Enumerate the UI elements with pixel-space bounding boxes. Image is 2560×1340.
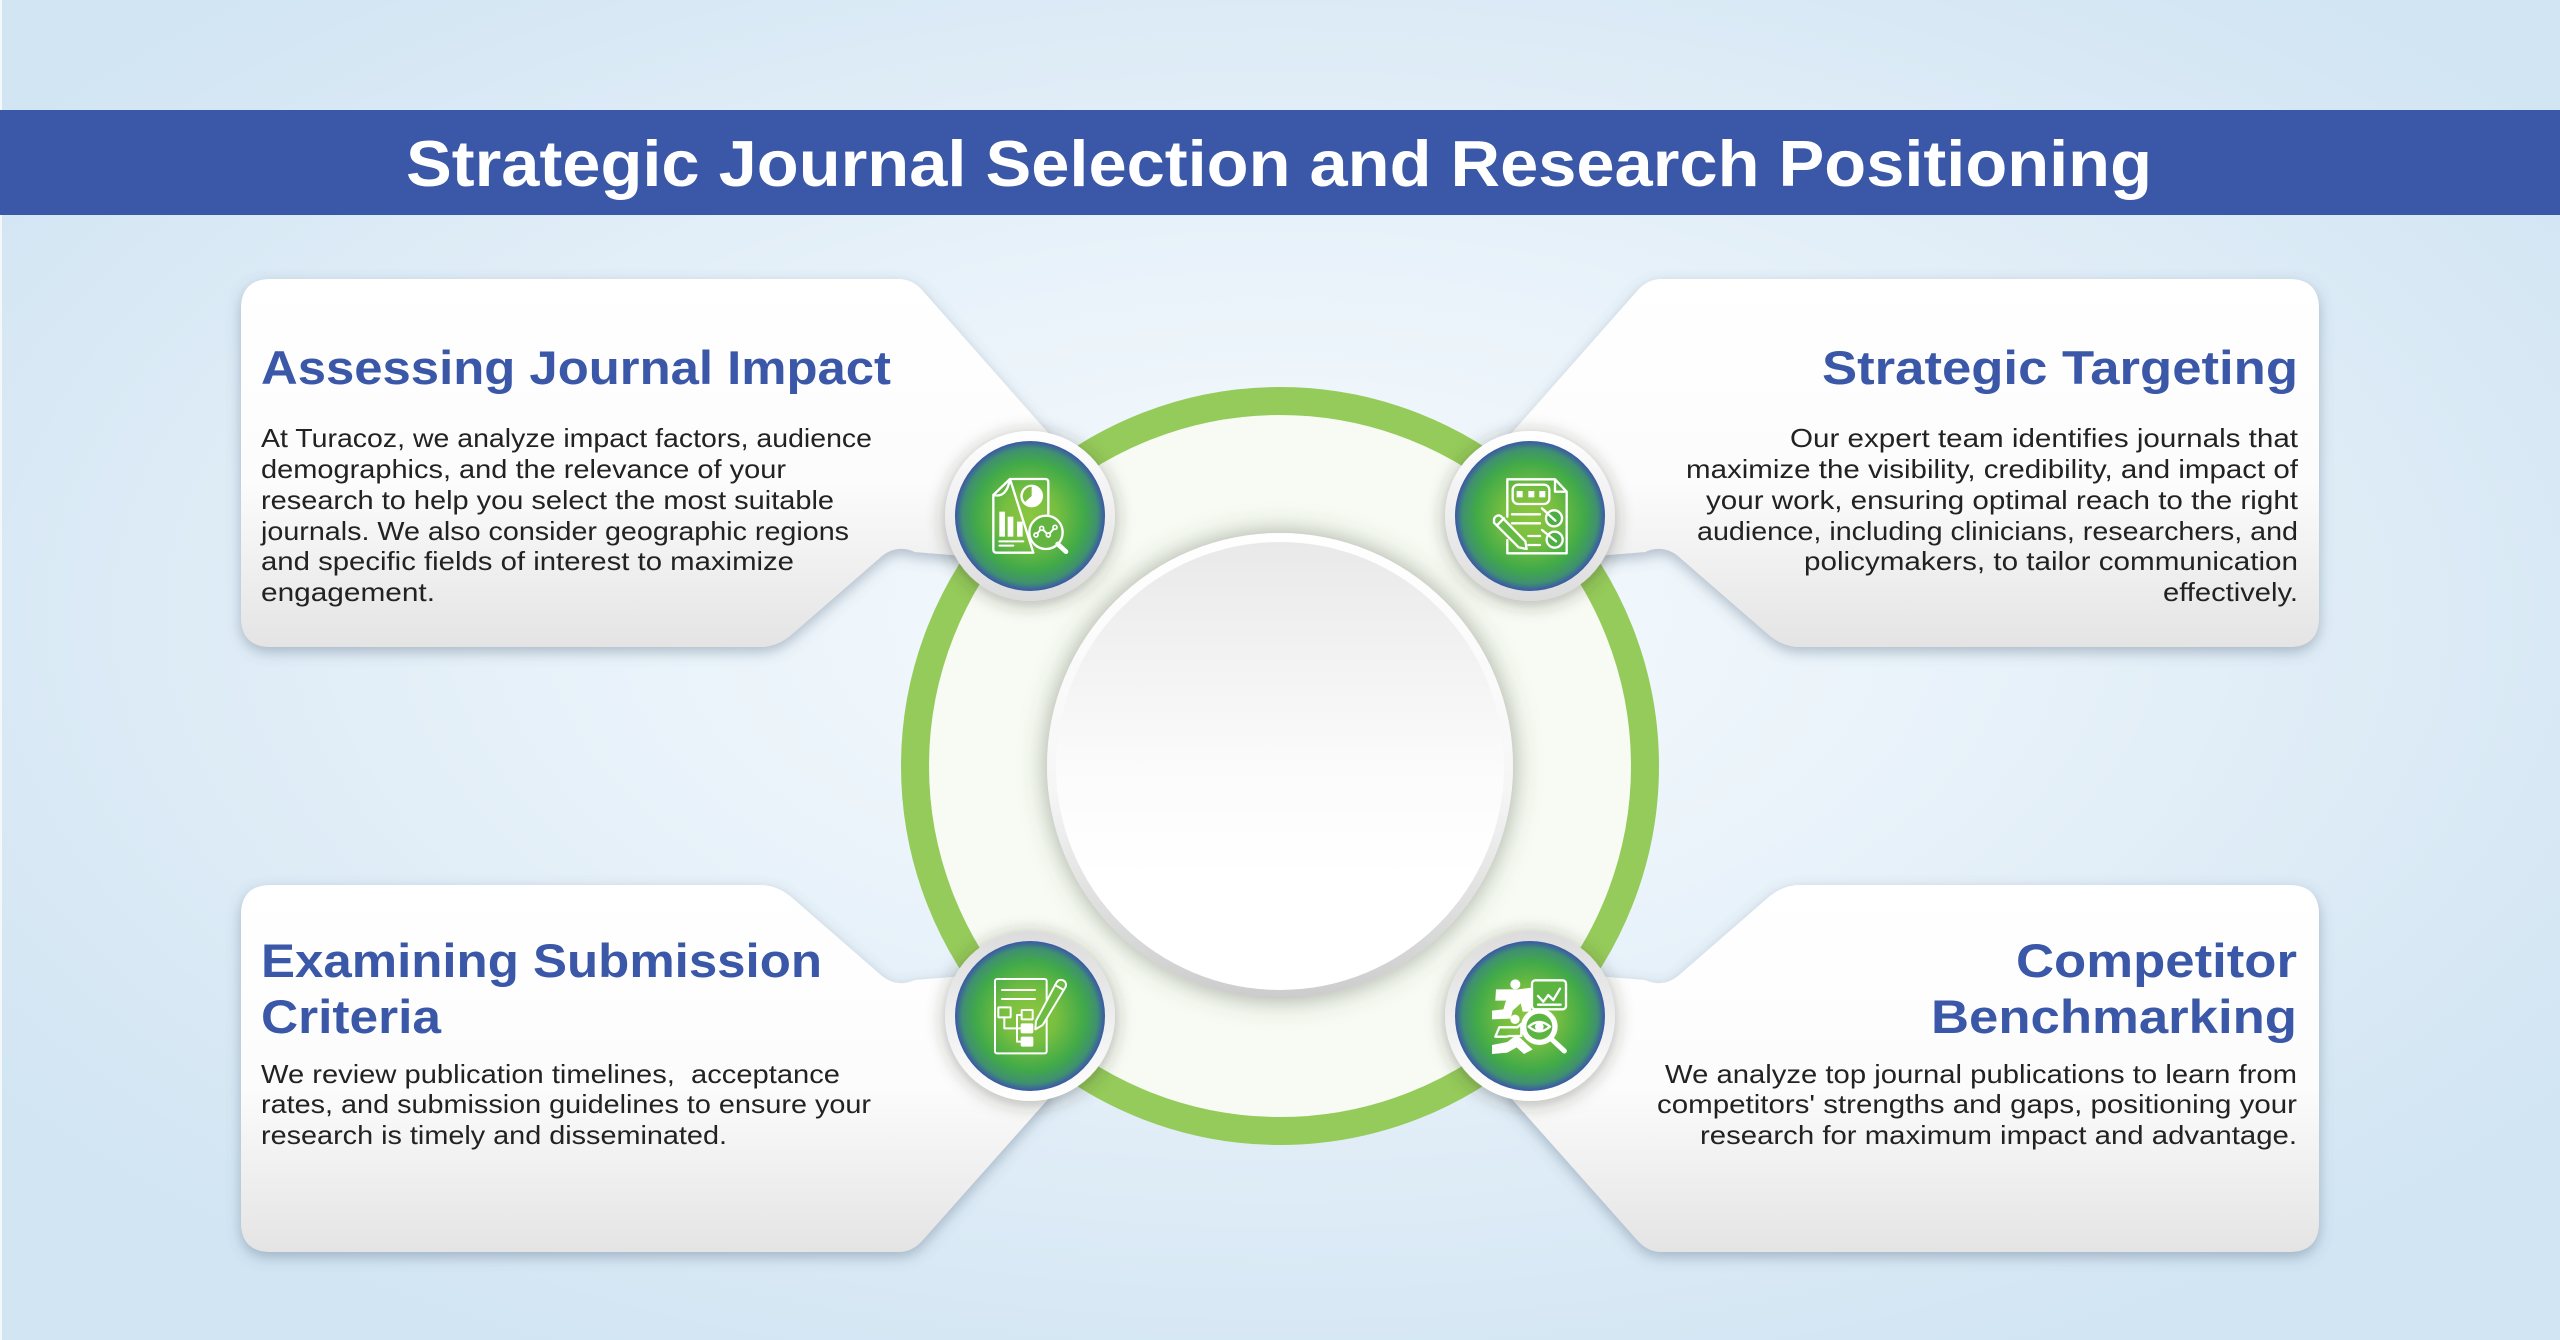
panel: examining submission criteria: Criteria bbox=[261, 990, 442, 1043]
central circle diagram bbox=[915, 401, 1645, 1131]
body text: Our expert team identifies journals that bbox=[1790, 423, 2299, 453]
body text bbox=[1657, 1059, 2297, 1150]
body text: We review publication timelines, acceptance bbox=[261, 1059, 840, 1089]
body text: effectively. bbox=[2163, 577, 2298, 607]
body text: demographics, and the relevance of your bbox=[261, 454, 786, 484]
body text: and specific fields of interest to maximize bbox=[261, 546, 794, 576]
panel: strategic targeting bbox=[1510, 279, 2319, 647]
body text: maximize the visibility, credibility, and impact of bbox=[1686, 454, 2299, 484]
heading: Assessing Journal Impact bbox=[261, 341, 891, 394]
body text: audience, including clinicians, researchers, and bbox=[1697, 516, 2298, 546]
heading: Examining Submission bbox=[261, 934, 822, 987]
body text: policymakers, to tailor communication bbox=[1804, 546, 2298, 576]
body text: We analyze top journal publications to learn from bbox=[1665, 1059, 2297, 1089]
title: Strategic Journal Selection and Research Positioning bbox=[406, 127, 2152, 200]
body text: your work, ensuring optimal reach to the right bbox=[1706, 485, 2299, 515]
title banner bbox=[0, 110, 2560, 215]
panel: assessing journal impact bbox=[241, 279, 1050, 647]
icon: report with chart and magnifier bbox=[945, 431, 1115, 601]
panel: examining submission criteria bbox=[241, 885, 1050, 1252]
body text: At Turacoz, we analyze impact factors, audience bbox=[261, 423, 872, 453]
body text: research for maximum impact and advantage. bbox=[1700, 1120, 2297, 1150]
centre white disc bbox=[1047, 533, 1513, 999]
green ring bbox=[915, 401, 1645, 1131]
icon: checklist with pencil bbox=[1445, 431, 1615, 601]
body text: competitors' strengths and gaps, positioning your bbox=[1657, 1089, 2297, 1119]
body text bbox=[1686, 423, 2299, 607]
body text bbox=[261, 1059, 871, 1150]
body text: research is timely and disseminated. bbox=[261, 1120, 727, 1150]
heading: Strategic Targeting bbox=[1822, 341, 2298, 394]
body text: research to help you select the most suitable bbox=[261, 485, 834, 515]
body text: rates, and submission guidelines to ensure your bbox=[261, 1089, 871, 1119]
body text: engagement. bbox=[261, 577, 435, 607]
panel: competitor benchmarking bbox=[1510, 885, 2319, 1252]
body text: journals. We also consider geographic regions bbox=[260, 516, 849, 546]
icon: flowchart document with pencil bbox=[945, 931, 1115, 1101]
heading: Competitor bbox=[2016, 934, 2297, 987]
body text bbox=[260, 423, 872, 607]
panel: competitor benchmarking: Benchmarking bbox=[1931, 990, 2297, 1043]
icon: competitors running with chart and magnifier bbox=[1445, 931, 1615, 1101]
